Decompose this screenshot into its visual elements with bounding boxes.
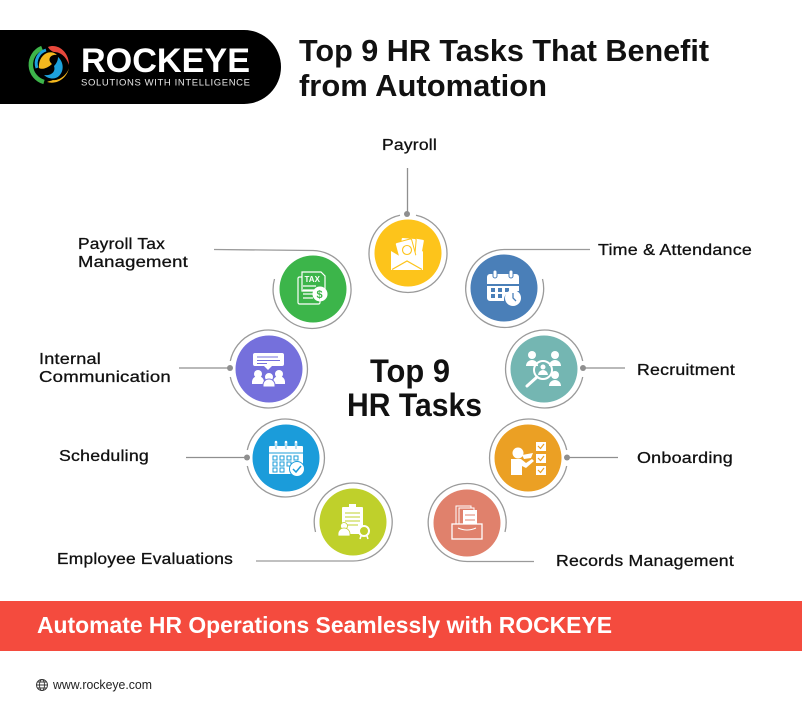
label: Payroll [382,137,437,154]
label: Time & Attendance [598,242,752,259]
call to action banner [0,601,802,651]
item: Employee Evaluations [57,483,392,568]
icon: calendar clock [487,270,521,306]
label: Recruitment [637,362,735,379]
center heading: HR Tasks [347,387,482,423]
logo banner [0,30,281,104]
item: Records Management [428,484,734,570]
logo wordmark: ROCKEYE [81,42,250,80]
center heading [347,353,482,423]
label: Scheduling [59,448,149,465]
item: Onboarding [490,419,733,497]
item: Payroll Tax Management: Management [78,254,188,271]
item: Internal Communication: Communication [39,369,171,386]
item: Scheduling [59,419,324,497]
label: Employee Evaluations [57,551,233,568]
item: Recruitment [506,330,735,408]
label: Payroll Tax [78,236,165,253]
item: Internal Communication [39,330,307,408]
icon: records drawer [452,506,482,539]
icon: money envelope [391,237,425,270]
item: Payroll [369,137,447,292]
icon: recruitment magnifier [526,351,561,386]
label: Internal [39,351,101,368]
title: Top 9 HR Tasks That Benefit [299,33,709,68]
icon: schedule calendar [269,442,304,476]
title: from Automation [299,68,547,103]
logo tagline: SOLUTIONS WITH INTELLIGENCE [81,78,250,88]
icon: team communication [252,353,285,387]
item: Time & Attendance [466,242,752,327]
icon: tax document: TAX [304,275,321,284]
label: Records Management [556,553,734,570]
icon: tax document [298,272,328,304]
icon: evaluation clipboard [338,504,369,539]
icon: tax document: $ [316,289,323,301]
icon: onboarding checklist [511,442,546,475]
title [299,33,709,103]
icon: swirl logo [31,46,69,83]
icon: globe [36,680,48,690]
item: Payroll Tax Management [78,236,351,328]
call to action banner: Automate HR Operations Seamlessly with ROCKEYE [37,612,612,638]
center heading: Top 9 [370,353,450,389]
footer website: www.rockeye.com [52,677,152,692]
label: Onboarding [637,450,733,467]
